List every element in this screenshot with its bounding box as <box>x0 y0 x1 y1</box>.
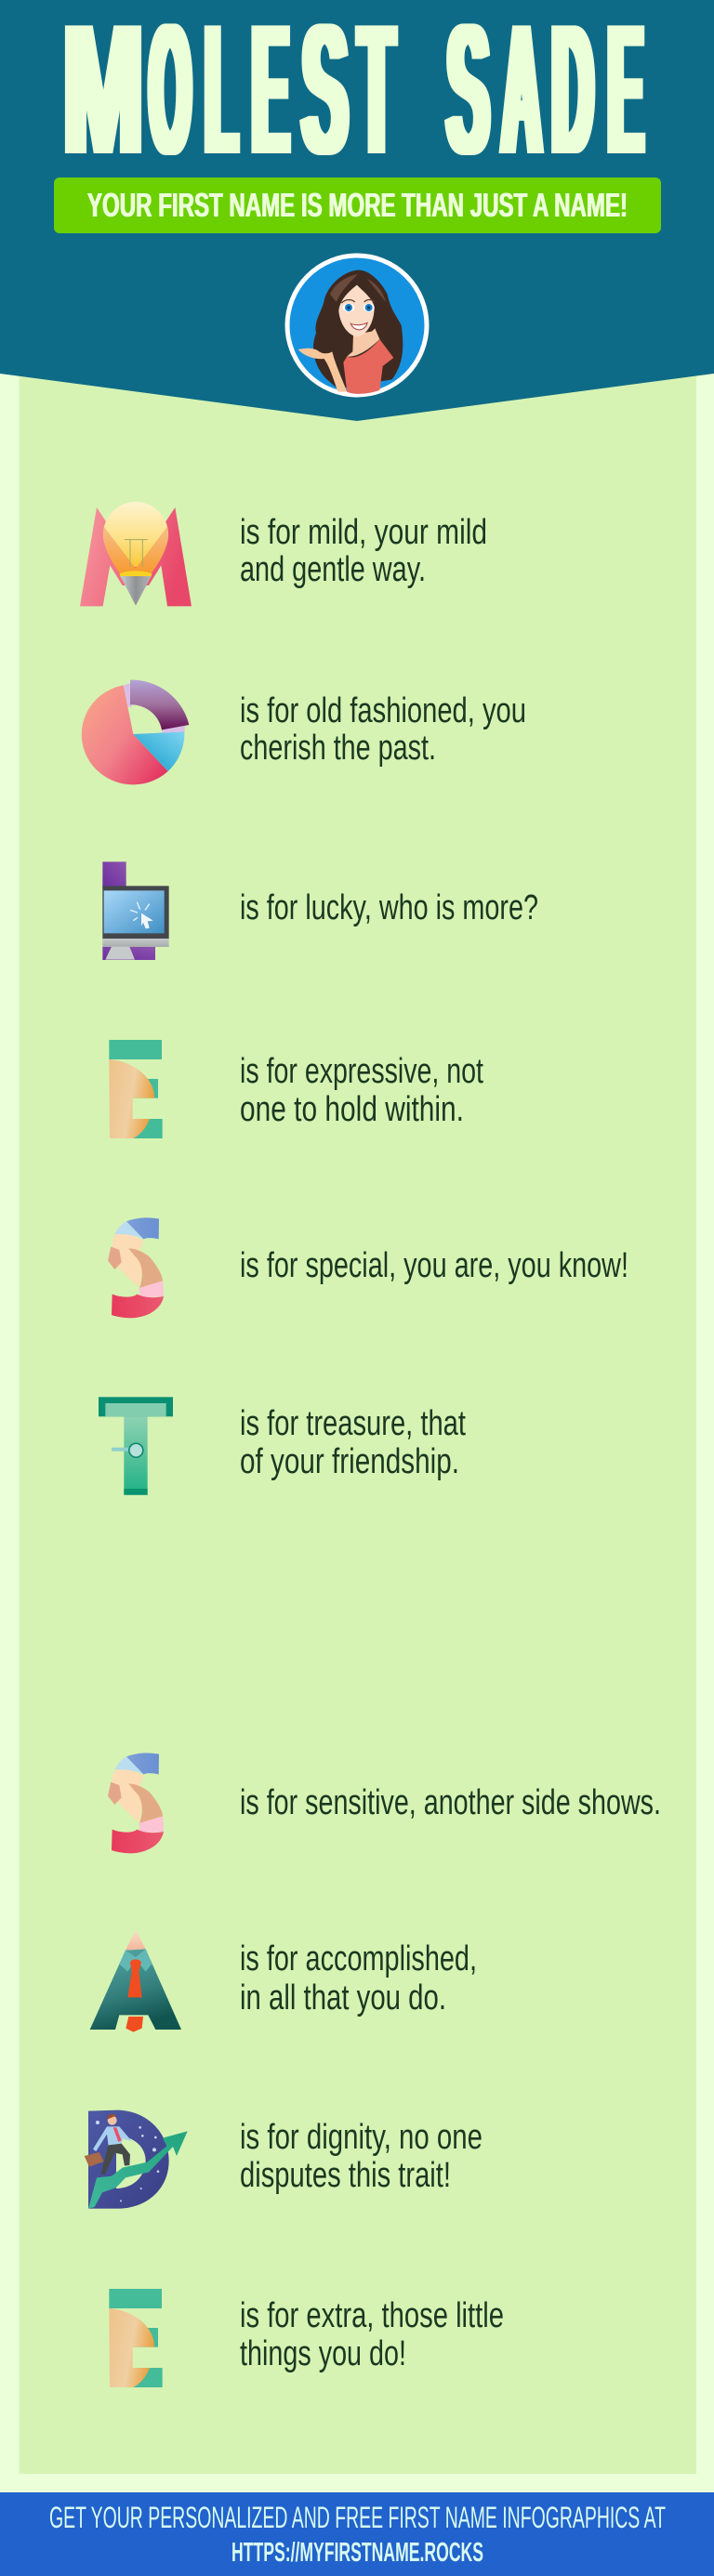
icon: letter O pie chart <box>82 680 189 784</box>
avatar: woman in circle <box>287 256 427 395</box>
row: A is for accomplished <box>90 1930 477 2032</box>
text: is for treasure: of your friendship. <box>240 1442 459 1481</box>
row: M is for mild <box>80 502 487 606</box>
header banner with chevron <box>0 0 714 421</box>
text: is for dignity <box>240 2118 483 2195</box>
icon: letter S handshake <box>108 1753 164 1853</box>
text: is for accomplished: is for accomplished, <box>240 1939 477 1978</box>
row: L is for lucky <box>102 861 538 960</box>
row: S is for sensitive <box>108 1753 661 1853</box>
subtitle bar <box>54 177 661 233</box>
icon: letter E with moon <box>109 2289 163 2387</box>
row: E is for extra <box>109 2289 504 2387</box>
row: T is for treasure <box>99 1397 466 1495</box>
text: is for lucky: is for lucky, who is more? <box>240 888 538 927</box>
row: O is for old fashioned <box>82 680 526 784</box>
icon: letter D with climbing businessman <box>85 2110 188 2209</box>
icon: letter S handshake <box>108 1217 164 1318</box>
text: is for extra: things you do! <box>240 2334 406 2373</box>
text: is for mild <box>240 513 487 589</box>
footer: HTTPS://MYFIRSTNAME.ROCKS <box>231 2538 483 2568</box>
text: is for expressive: is for expressive, not <box>240 1052 483 1091</box>
title <box>63 0 643 193</box>
row: D is for dignity <box>85 2110 483 2209</box>
icon: letter T door <box>99 1397 173 1495</box>
footer <box>0 2492 714 2576</box>
text: is for dignity: disputes this trait! <box>240 2156 451 2195</box>
text: is for extra: is for extra, those little <box>240 2296 504 2335</box>
row: E is for expressive <box>109 1040 483 1138</box>
text: is for mild: is for mild, your mild <box>240 513 487 552</box>
text: is for dignity: is for dignity, no one <box>240 2118 483 2157</box>
text: is for accomplished <box>240 1939 477 2017</box>
text: is for old fashioned: cherish the past. <box>240 729 436 768</box>
text: is for expressive <box>240 1052 483 1129</box>
text: is for old fashioned <box>240 691 526 768</box>
text: is for treasure: is for treasure, that <box>240 1404 466 1443</box>
content panel <box>19 353 696 2474</box>
icon: letter E with moon <box>109 1040 163 1138</box>
text: is for accomplished: in all that you do. <box>240 1978 446 2017</box>
text: is for treasure <box>240 1404 466 1481</box>
row: S is for special <box>108 1217 628 1318</box>
icon: letter A with tie <box>90 1930 181 2032</box>
icon: letter M with lightbulb <box>80 502 192 606</box>
icon: letter L computer monitor <box>102 861 169 960</box>
text: is for expressive: one to hold within. <box>240 1090 464 1129</box>
text: is for extra <box>240 2296 504 2373</box>
text: is for mild: and gentle way. <box>240 550 426 589</box>
text: is for old fashioned: is for old fashioned, you <box>240 691 526 730</box>
